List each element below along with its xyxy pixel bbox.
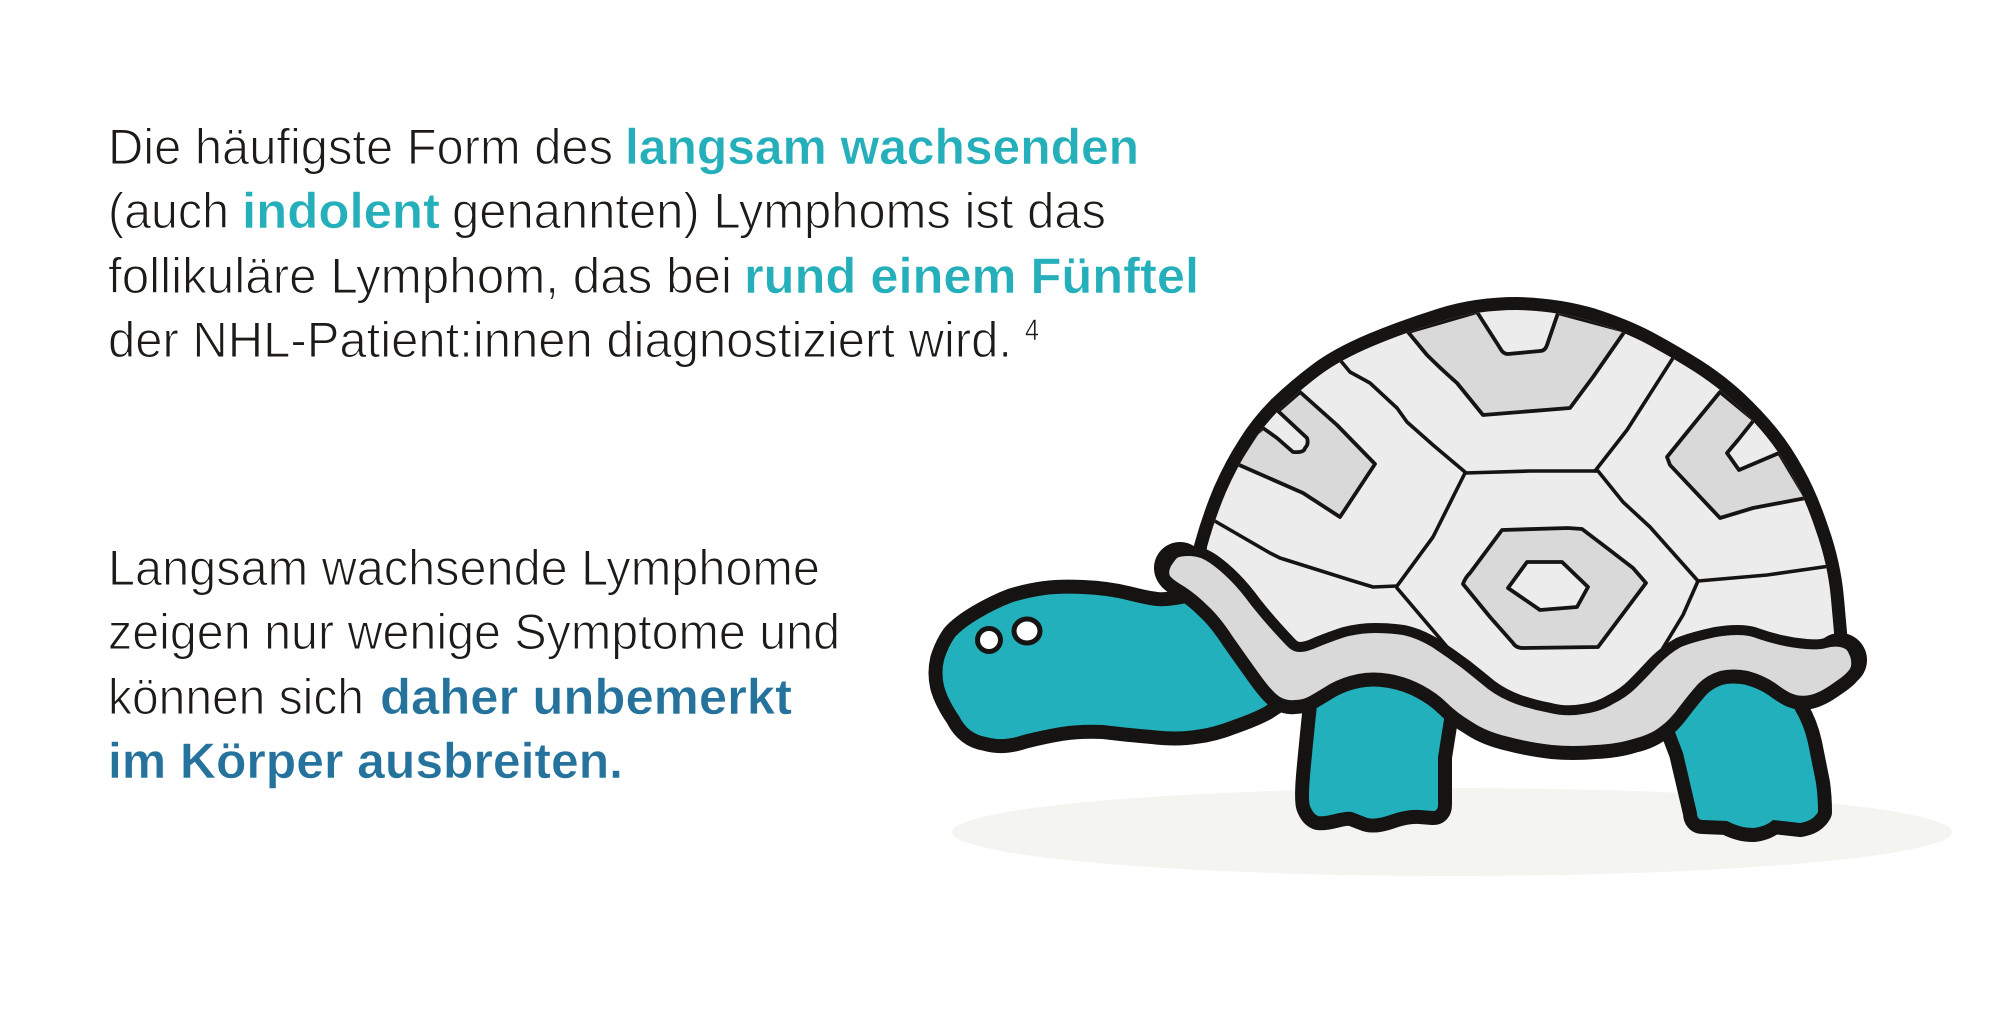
turtle eyes — [978, 619, 1040, 652]
text block: few symptoms, spreads unnoticed: zeigen nur wenige Symptome und — [108, 604, 840, 660]
text block: most common indolent lymphoma: Die häufigste Form des — [108, 119, 613, 175]
text block: most common indolent lymphoma: langsam wachsenden — [625, 119, 1139, 175]
turtle front leg — [1309, 660, 1445, 819]
text block: most common indolent lymphoma: rund einem Fünftel — [744, 248, 1199, 304]
text block: few symptoms, spreads unnoticed: im Körper ausbreiten. — [108, 733, 623, 789]
turtle shell skirt — [1154, 542, 1867, 748]
text block: few symptoms, spreads unnoticed: daher unbemerkt — [380, 669, 792, 725]
turtle head — [942, 594, 1290, 739]
text block: most common indolent lymphoma: (auch — [108, 183, 229, 239]
text block: most common indolent lymphoma — [108, 119, 1199, 368]
text block: most common indolent lymphoma: 4 — [1025, 314, 1039, 347]
text block: most common indolent lymphoma: indolent — [242, 183, 440, 239]
icon: turtle — [942, 310, 1867, 828]
ground shadow — [952, 788, 1952, 876]
turtle back leg — [1675, 665, 1818, 828]
text block: few symptoms, spreads unnoticed — [108, 540, 840, 789]
text block: most common indolent lymphoma: genannten) Lymphoms ist das — [452, 183, 1106, 239]
text block: most common indolent lymphoma: der NHL-Patient:innen diagnostiziert wird. — [108, 312, 1012, 368]
text block: few symptoms, spreads unnoticed: Langsam wachsende Lymphome — [108, 540, 820, 596]
turtle shell dome — [1205, 310, 1836, 730]
text block: few symptoms, spreads unnoticed: können sich — [108, 669, 364, 725]
text block: most common indolent lymphoma: follikuläre Lymphom, das bei — [108, 248, 732, 304]
